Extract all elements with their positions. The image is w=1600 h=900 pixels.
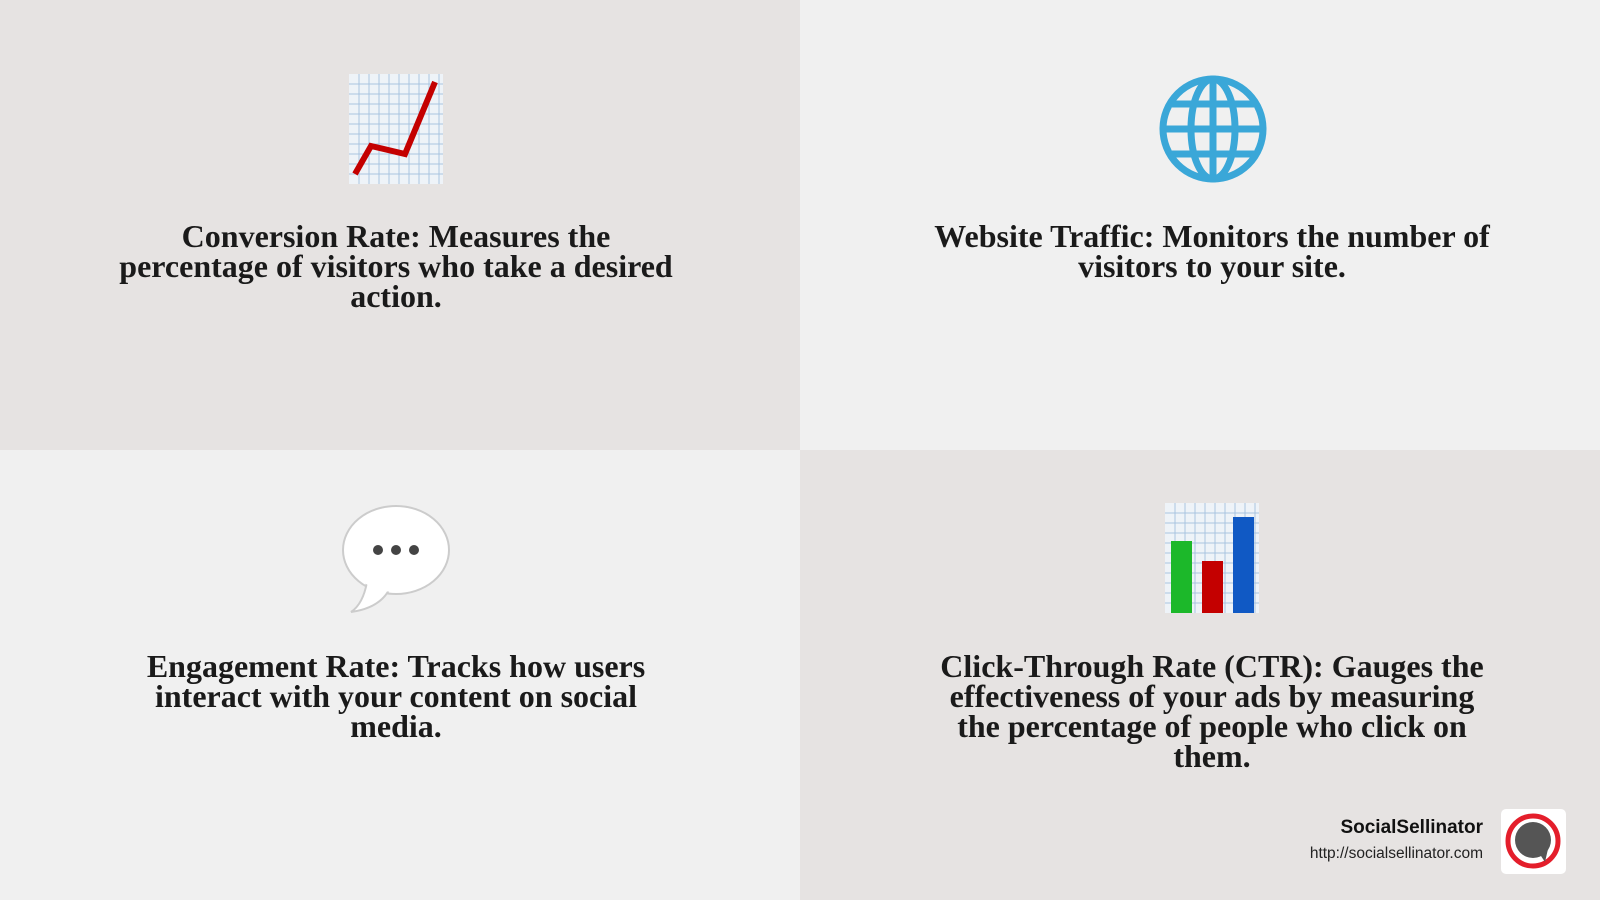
text: click-through rate: the percentage of people who click on	[957, 708, 1467, 744]
text: engagement rate	[147, 648, 645, 744]
panel: website traffic	[800, 0, 1600, 450]
brand: url: http://socialsellinator.com	[1310, 845, 1483, 862]
text: click-through rate: them.	[1173, 738, 1251, 774]
text: conversion rate: Conversion Rate: Measures the	[182, 218, 610, 254]
text: conversion rate	[119, 218, 673, 314]
text: click-through rate: effectiveness of your ads by measuring	[950, 678, 1474, 714]
icon: bar chart	[1165, 503, 1259, 613]
text: conversion rate: percentage of visitors who take a desired	[119, 248, 673, 284]
icon: globe	[1160, 76, 1266, 182]
text: website traffic: Website Traffic: Monitors the number of	[934, 218, 1490, 254]
brand: name: SocialSellinator	[1340, 817, 1483, 838]
panel: click-through rate	[800, 450, 1600, 900]
text: website traffic: visitors to your site.	[1078, 248, 1346, 284]
text: engagement rate: Engagement Rate: Tracks how users	[147, 648, 645, 684]
panel: engagement rate	[0, 450, 800, 900]
icon: chart up	[349, 74, 443, 184]
text: engagement rate: interact with your content on social	[155, 678, 637, 714]
text: engagement rate: media.	[350, 708, 442, 744]
text: conversion rate: action.	[350, 278, 442, 314]
logo	[1501, 809, 1566, 874]
text: click-through rate	[940, 648, 1484, 774]
panel: conversion rate	[0, 0, 800, 450]
text: website traffic	[934, 218, 1490, 284]
icon: speech bubble	[342, 505, 450, 613]
text: click-through rate: Click-Through Rate (CTR): Gauges the	[940, 648, 1484, 684]
